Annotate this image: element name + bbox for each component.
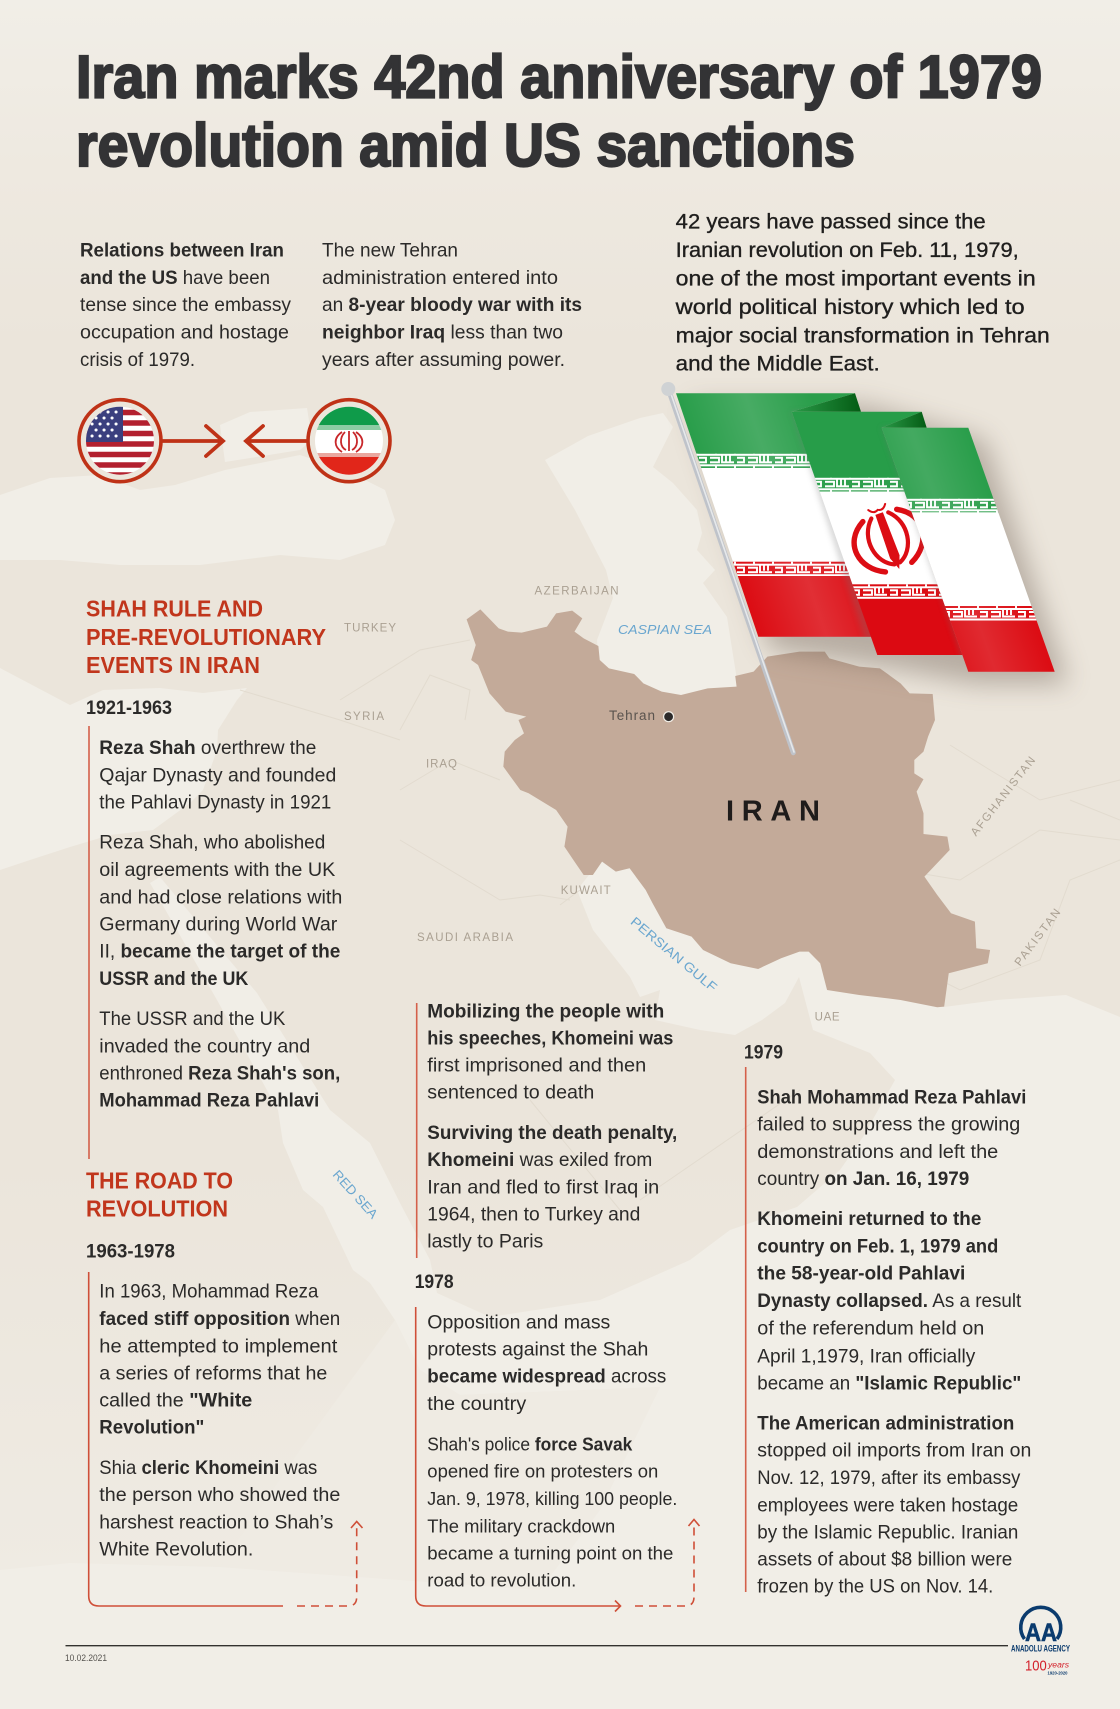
logo: Anadolu Agency: AA	[1025, 1619, 1057, 1647]
text: American administration	[757, 1412, 1031, 1598]
text block: intro: major social transformation in Tehran	[676, 324, 1050, 347]
text: Khomeini exiled	[427, 1122, 677, 1253]
timeline line	[88, 726, 90, 1159]
text: invasion	[99, 1008, 340, 1112]
text: Savak crackdown: The military crackdown	[427, 1515, 615, 1536]
arrow: Iran to US	[246, 426, 306, 456]
text block: war with Iraq: an 8-year bloody war with its	[322, 294, 582, 316]
flag panel 1	[676, 393, 871, 637]
flag panel 3	[882, 428, 1055, 672]
sea: mediterranean	[0, 668, 247, 870]
flag panel 2	[792, 412, 962, 655]
map labels: SYRIA	[344, 711, 384, 723]
text: American administration: by the Islamic Republic. Iranian	[757, 1521, 1018, 1543]
map labels: AZERBAIJAN	[534, 585, 618, 597]
year label 1963-1978: 1963-1978	[86, 1240, 175, 1262]
text: White Revolution: faced stiff opposition when	[99, 1308, 340, 1330]
timeline line	[745, 1067, 747, 1592]
text: Khomeini returned	[757, 1208, 1022, 1394]
heading: Shah rule: SHAH RULE AND	[86, 596, 263, 622]
map: Iran country shape	[467, 609, 990, 1007]
text: White Revolution	[99, 1281, 340, 1438]
text block: intro	[675, 210, 1050, 376]
logo: Anadolu Agency: 100	[1025, 1658, 1047, 1675]
text: Reza Shah founded dynasty: the Pahlavi Dynasty in 1921	[99, 791, 331, 813]
text: target of USSR and UK: oil agreements with the UK	[99, 859, 335, 881]
map labels: KUWAIT	[561, 885, 611, 897]
text: Reza Shah founded dynasty: Qajar Dynasty and founded	[99, 764, 336, 786]
text block: relations between Iran and the US: and the US have been	[80, 267, 270, 289]
panel: 1979	[744, 1041, 1031, 1598]
heading: Shah rule	[86, 596, 326, 678]
text: White Revolution: In 1963, Mohammad Reza	[99, 1281, 318, 1303]
map labels: PERSIAN GULF	[628, 914, 720, 995]
text: White Revolution: called the "White	[99, 1390, 252, 1412]
text: target of USSR and UK: II, became the target of the	[99, 941, 340, 963]
text: American administration: Nov. 12, 1979, after its embassy	[757, 1467, 1021, 1489]
text: Khomeini imprisoned: his speeches, Khomeini was	[427, 1027, 673, 1049]
text: Savak crackdown: Shah's police force Savak	[427, 1434, 633, 1455]
text: mass protests: became widespread across	[427, 1366, 667, 1388]
text: Reza Shah founded dynasty	[99, 737, 336, 813]
text: Shah left: failed to suppress the growing	[757, 1114, 1020, 1136]
text: Khomeini returned: became an "Islamic Republic"	[757, 1372, 1021, 1394]
flag of Iran waving	[661, 382, 1068, 753]
heading: road to revolution	[86, 1167, 233, 1222]
heading: Shah rule: EVENTS IN IRAN	[86, 652, 260, 678]
text: mass protests: Opposition and mass	[427, 1311, 611, 1333]
year label 1979: 1979	[744, 1041, 783, 1063]
text: American administration: assets of about $8 billion were	[757, 1549, 1012, 1571]
IRAN label: IRAN	[726, 796, 820, 828]
text: Savak crackdown: road to revolution.	[427, 1570, 576, 1591]
timeline arrow	[416, 1307, 700, 1612]
text: Khomeini returned: country on Feb. 1, 1979 and	[757, 1235, 998, 1257]
fold 2	[882, 412, 927, 428]
fold 1	[792, 393, 861, 412]
text block: intro: one of the most important events in	[676, 268, 1036, 291]
panel: Shah rule	[86, 596, 342, 1159]
text: target of USSR and UK: Germany during World War	[99, 913, 338, 935]
text: Khomeini returned: of the referendum held on	[757, 1318, 984, 1340]
text: White Revolution: Revolution"	[99, 1416, 204, 1438]
sea: caspian	[545, 413, 737, 700]
text: invasion: enthroned Reza Shah's son,	[99, 1062, 340, 1084]
heading: road to revolution: THE ROAD TO	[86, 1167, 233, 1193]
text: Reza Shah founded dynasty: Reza Shah overthrew the	[99, 737, 316, 759]
timeline line	[416, 1003, 418, 1258]
text block: war with Iraq: The new Tehran	[322, 240, 458, 262]
map labels	[330, 585, 1063, 1222]
map labels: CASPIAN SEA	[618, 622, 712, 637]
text: mass protests: the country	[427, 1393, 527, 1415]
text: cleric Khomeini: Shia cleric Khomeini was	[99, 1457, 318, 1479]
text: Khomeini exiled: Khomeini was exiled from	[427, 1149, 652, 1171]
panel: Khomeini and 1978	[415, 1000, 700, 1612]
panel: road to revolution	[86, 1167, 362, 1606]
title: revolution amid US sanctions	[76, 112, 855, 179]
faint country borders	[240, 640, 1120, 1210]
text block: intro: world political history which led to	[675, 296, 1025, 319]
map labels: RED SEA	[330, 1167, 381, 1222]
text block: relations between Iran and the US	[80, 240, 291, 371]
text: Khomeini returned: Khomeini returned to the	[757, 1208, 981, 1230]
text: American administration: employees were taken hostage	[757, 1494, 1018, 1516]
text: cleric Khomeini: the person who showed the	[99, 1484, 340, 1506]
text: mass protests: protests against the Shah	[427, 1339, 648, 1361]
map labels: IRAQ	[426, 759, 457, 771]
text block: war with Iraq	[322, 240, 582, 371]
text: target of USSR and UK: USSR and the UK	[99, 968, 248, 990]
year label 1978: 1978	[415, 1271, 454, 1293]
text: Khomeini exiled: 1964, then to Turkey and	[427, 1204, 640, 1226]
text block: relations between Iran and the US: tense since the embassy	[80, 294, 291, 316]
text: mass protests	[427, 1311, 667, 1415]
text block: war with Iraq: neighbor Iraq less than two	[322, 322, 563, 344]
text: invasion: The USSR and the UK	[99, 1008, 285, 1030]
text block: war with Iraq: administration entered into	[322, 267, 558, 289]
text: cleric Khomeini: White Revolution.	[99, 1538, 253, 1560]
land: horn of africa	[220, 1320, 660, 1590]
text block: war with Iraq: years after assuming power.	[322, 349, 565, 371]
text: Khomeini returned: Dynasty collapsed. As a result	[757, 1290, 1022, 1312]
map labels: AFGHANISTAN	[969, 755, 1038, 839]
Tehran label: Tehran	[609, 708, 655, 723]
text: Khomeini exiled: Iran and fled to first Iraq in	[427, 1176, 659, 1198]
map labels: PAKISTAN	[1013, 907, 1063, 969]
year label 1921-1963: 1921-1963	[86, 697, 172, 719]
map labels: SAUDI ARABIA	[417, 932, 513, 944]
title: Iran marks 42nd anniversary of 1979	[76, 44, 1042, 111]
text: Khomeini imprisoned: first imprisoned and then	[427, 1055, 646, 1077]
text: Khomeini imprisoned: Mobilizing the people with	[427, 1000, 664, 1022]
icon: Iran flag badge	[308, 400, 390, 482]
logo: Anadolu Agency: years	[1047, 1661, 1069, 1670]
text block: intro: Iranian revolution on Feb. 11, 1979,	[676, 239, 1019, 262]
text: Khomeini exiled: lastly to Paris	[427, 1231, 544, 1253]
text: Savak crackdown: Jan. 9, 1978, killing 100 people.	[427, 1488, 677, 1509]
text: cleric Khomeini	[99, 1457, 340, 1560]
text: Khomeini imprisoned	[427, 1000, 673, 1104]
text: Shah left	[757, 1086, 1026, 1190]
logo: Anadolu Agency	[1011, 1607, 1070, 1676]
text: Khomeini exiled: Surviving the death penalty,	[427, 1122, 677, 1144]
text: cleric Khomeini: harshest reaction to Shah’s	[99, 1511, 334, 1533]
arrow: US to Iran	[163, 426, 223, 456]
text: American administration: The American administration	[757, 1412, 1014, 1434]
text: invasion: Mohammad Reza Pahlavi	[99, 1090, 319, 1112]
emblem	[851, 502, 924, 575]
flag pole	[661, 382, 794, 753]
text: Khomeini imprisoned: sentenced to death	[427, 1082, 594, 1104]
heading: road to revolution: REVOLUTION	[86, 1196, 228, 1222]
icon: US flag badge	[79, 400, 161, 482]
map labels: UAE	[815, 1012, 840, 1024]
text block: intro: 42 years have passed since the	[676, 210, 986, 233]
footer rule and date: 10.02.2021	[65, 1653, 107, 1663]
map labels: TURKEY	[344, 623, 396, 635]
text: target of USSR and UK: Reza Shah, who abolished	[99, 832, 325, 854]
text: American administration: stopped oil imports from Iran on	[757, 1440, 1031, 1462]
text: Savak crackdown: became a turning point on the	[427, 1542, 673, 1563]
text: Shah left: Shah Mohammad Reza Pahlavi	[757, 1086, 1026, 1108]
text: White Revolution: a series of reforms that he	[99, 1362, 327, 1384]
text: target of USSR and UK: and had close relations with	[99, 886, 342, 908]
text: Shah left: demonstrations and left the	[757, 1141, 998, 1163]
sea: black sea	[0, 455, 395, 565]
text block: relations between Iran and the US: occupation and hostage	[80, 322, 289, 344]
text block: relations between Iran and the US: crisis of 1979.	[80, 349, 195, 371]
text: Khomeini returned: April 1,1979, Iran officially	[757, 1345, 976, 1367]
text block: relations between Iran and the US: Relations between Iran	[80, 240, 284, 262]
logo: Anadolu Agency: ANADOLU AGENCY	[1011, 1644, 1070, 1655]
text: Savak crackdown: opened fire on protesters on	[427, 1461, 658, 1482]
text: target of USSR and UK	[99, 832, 342, 990]
timeline arrow	[89, 1272, 362, 1606]
flag shadow	[690, 405, 1068, 684]
text: Khomeini returned: the 58-year-old Pahlavi	[757, 1263, 965, 1285]
sea: red sea, persian gulf and arabian sea	[0, 850, 1120, 1709]
text: American administration: frozen by the US on Nov. 14.	[757, 1576, 993, 1598]
text: invasion: invaded the country and	[99, 1036, 310, 1058]
text: White Revolution: he attempted to implement	[99, 1335, 338, 1357]
heading: Shah rule: PRE-REVOLUTIONARY	[86, 624, 326, 650]
sea: azov	[220, 408, 312, 462]
text block: intro: and the Middle East.	[676, 353, 880, 376]
logo: Anadolu Agency: 1920-2020	[1048, 1670, 1068, 1676]
text: Shah left: country on Jan. 16, 1979	[757, 1168, 969, 1190]
text: Savak crackdown	[427, 1434, 677, 1591]
Tehran dot	[664, 712, 674, 722]
title	[76, 44, 1042, 179]
